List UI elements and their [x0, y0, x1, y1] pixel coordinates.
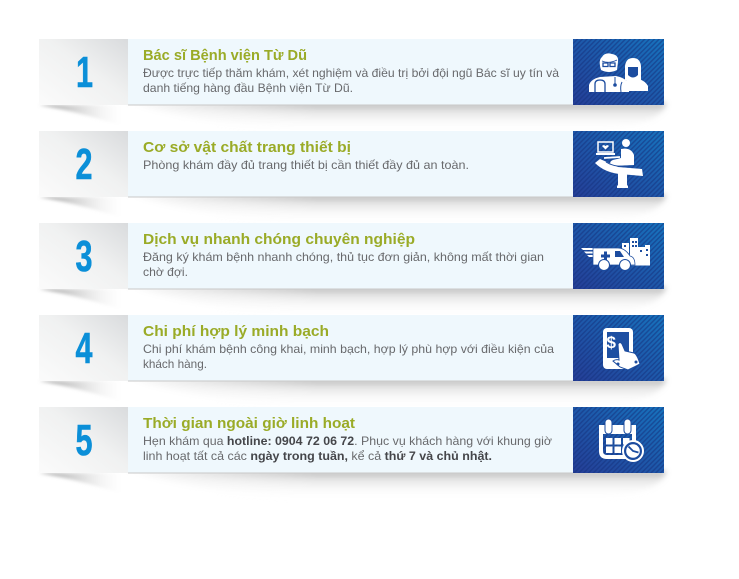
heading: Cơ sở vật chất trang thiết bị — [143, 139, 351, 156]
row 3: fast service — [39, 223, 666, 320]
row 1: doctors — [39, 39, 666, 136]
heading: Thời gian ngoài giờ linh hoạt — [143, 415, 355, 432]
text block — [143, 342, 554, 371]
heading: Bác sĩ Bệnh viện Từ Dũ — [143, 47, 307, 64]
text block: danh tiếng hàng đầu Bệnh viện Từ Dũ. — [143, 81, 353, 95]
shadow — [39, 471, 666, 504]
text block — [143, 66, 559, 95]
panel: text — [128, 223, 573, 290]
row 4: cost — [39, 315, 666, 412]
icon: calendar clock — [573, 407, 664, 473]
panel: text — [128, 131, 573, 198]
row 5: flexible time — [39, 407, 666, 504]
number box — [39, 131, 128, 197]
number 4: 4 — [76, 324, 93, 373]
row 2: equipment — [39, 131, 666, 228]
text block: chờ đợi. — [143, 265, 188, 279]
shadow — [39, 379, 666, 412]
panel: text — [128, 315, 573, 382]
number box — [39, 223, 128, 289]
panel: text — [128, 407, 573, 474]
icon: ambulance — [573, 223, 664, 289]
text block: Đăng ký khám bệnh nhanh chóng, thủ tục đơn giản, không mất thời gian — [143, 250, 544, 264]
text block: khách hàng. — [143, 357, 207, 371]
number box — [39, 39, 128, 105]
text block — [143, 434, 552, 463]
text block: linh hoạt tất cả các ngày trong tuần, kể cả thứ 7 và chủ nhật. — [143, 449, 492, 463]
icon: medical chair — [573, 131, 664, 197]
number 2: 2 — [76, 140, 92, 189]
text block: Chi phí khám bệnh công khai, minh bạch, hợp lý phù hợp với điều kiện của — [143, 342, 554, 356]
shadow — [39, 287, 666, 320]
icon: tablet payment — [573, 315, 664, 381]
text block — [143, 250, 544, 279]
number 5: 5 — [76, 416, 92, 465]
shadow — [39, 103, 666, 136]
icon: doctors — [573, 39, 664, 105]
text block: Được trực tiếp thăm khám, xét nghiệm và điều trị bởi đội ngũ Bác sĩ uy tín và — [143, 66, 559, 80]
heading: Dịch vụ nhanh chóng chuyên nghiệp — [143, 231, 415, 248]
heading: Chi phí hợp lý minh bạch — [143, 323, 329, 340]
number box — [39, 407, 128, 473]
number 3: 3 — [76, 232, 92, 281]
text block: Hẹn khám qua hotline: 0904 72 06 72 . Phục vụ khách hàng với khung giờ — [143, 434, 552, 448]
text block: Phòng khám đầy đủ trang thiết bị cần thiết đầy đủ an toàn. — [143, 158, 469, 172]
icon: tablet payment: $ — [606, 333, 616, 352]
panel: text — [128, 39, 573, 106]
number box — [39, 315, 128, 381]
shadow — [39, 195, 666, 228]
number 1: 1 — [76, 48, 93, 97]
